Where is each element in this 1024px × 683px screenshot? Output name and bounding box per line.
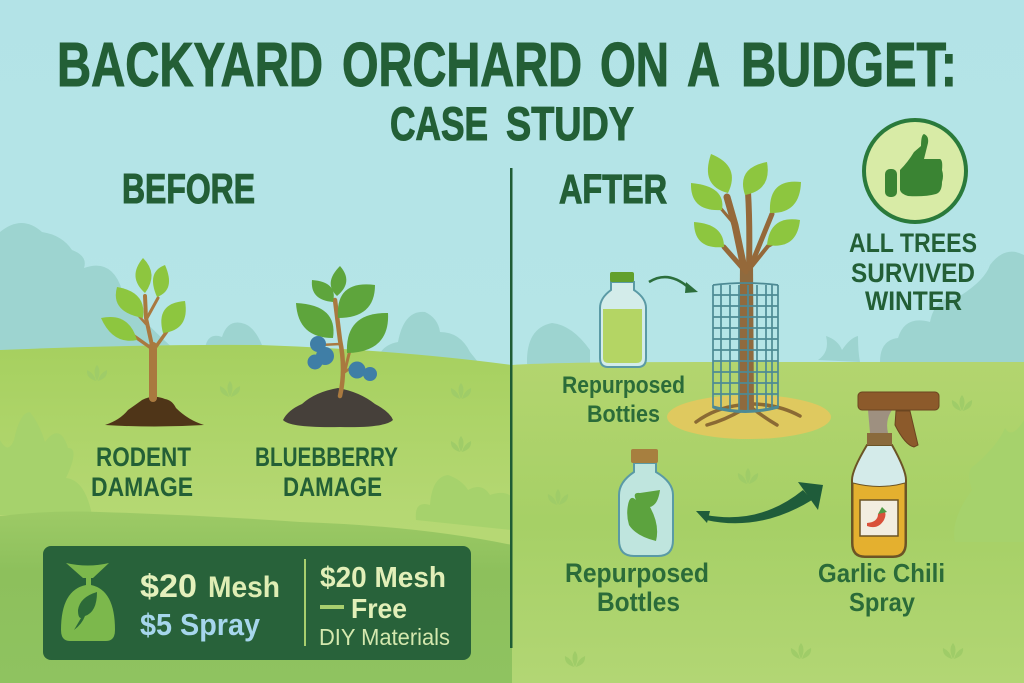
text: before costs: Mesh [208, 571, 280, 604]
text: after costs [319, 562, 450, 650]
title: BACKYARD [57, 31, 323, 100]
label: repurposed botties [562, 372, 685, 428]
label: garlic chili spray [818, 558, 945, 617]
icon: thumbs up badge [864, 120, 966, 222]
label: repurposed bottles: Repurposed [565, 558, 709, 588]
label: rodent damage: DAMAGE [91, 472, 193, 502]
icon: money bag with leaf [61, 563, 115, 641]
subtitle [390, 97, 634, 150]
callout: all trees survived winter: ALL TREES [849, 228, 977, 258]
text: before costs: $20 [140, 568, 197, 604]
subtitle: STUDY [506, 97, 634, 150]
right meadow [512, 362, 1024, 683]
label: repurposed botties: Repurposed [562, 372, 685, 399]
label: bluebberry damage [255, 442, 398, 502]
lower left hillside [0, 512, 512, 683]
title: ORCHARD [342, 31, 582, 100]
left meadow [0, 345, 512, 683]
background hills and bushes [0, 223, 1024, 364]
arrow: bottle to spray [696, 482, 823, 523]
label: garlic chili spray: Garlic Chili [818, 558, 945, 588]
grass tufts [87, 365, 972, 667]
illustration: leaf bottle [619, 449, 673, 556]
label: rodent damage: RODENT [96, 442, 191, 472]
illustration: garlic chili spray bottle [852, 392, 939, 557]
title [57, 31, 957, 100]
label: bluebberry damage: BLUEBBERRY [255, 442, 398, 472]
panel: costs [43, 546, 471, 660]
illustration: tree with wire mesh guard [667, 154, 831, 439]
foreground bushes [0, 412, 1024, 542]
centre divider [510, 168, 512, 648]
label: rodent damage [91, 442, 193, 502]
label: bluebberry damage: DAMAGE [283, 472, 382, 502]
text: before costs: $5 Spray [140, 607, 261, 642]
text: after costs: DIY Materials [319, 624, 450, 650]
title: A [687, 31, 720, 100]
label: repurposed botties: Botties [587, 401, 660, 428]
illustration: blueberry damaged bush [283, 266, 393, 427]
heading: after: AFTER [559, 166, 667, 212]
callout: all trees survived winter: WINTER [865, 286, 962, 316]
text: before costs [140, 568, 280, 642]
label: garlic chili spray: Spray [849, 587, 915, 617]
arrow: bottle to mesh [649, 277, 698, 293]
label: repurposed bottles [565, 558, 709, 617]
wire mesh [713, 283, 778, 412]
illustration: rodent damaged sapling [101, 258, 204, 426]
text: after costs: Free [351, 593, 407, 624]
label: repurposed bottles: Bottles [597, 587, 680, 617]
text: after costs: $20 Mesh [320, 562, 446, 594]
callout: all trees survived winter: SURVIVED [851, 258, 975, 288]
title: ON [600, 31, 669, 100]
title: BUDGET: [741, 31, 957, 100]
subtitle: CASE [390, 97, 488, 150]
callout: all trees survived winter [849, 228, 977, 316]
heading: before: BEFORE [122, 165, 255, 212]
illustration: green liquid bottle [600, 272, 646, 367]
